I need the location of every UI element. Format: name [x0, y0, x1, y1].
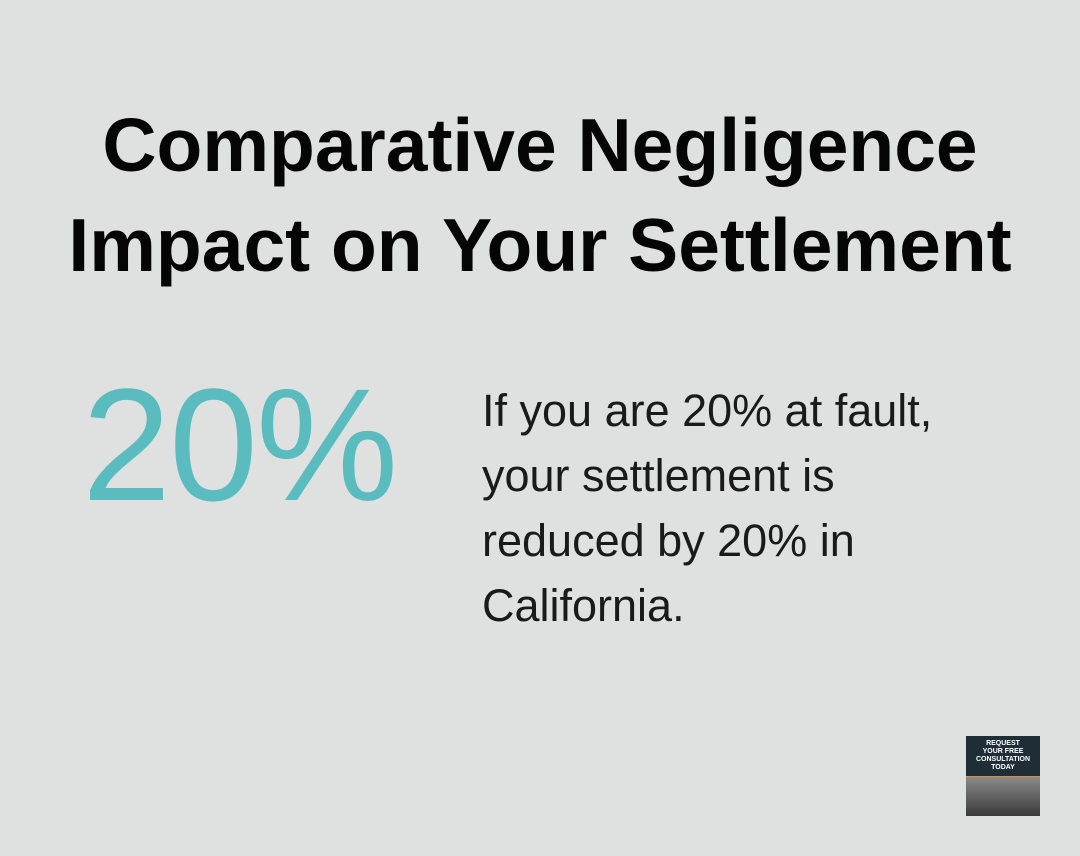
title: Impact on Your Settlement — [68, 203, 1012, 287]
badge: consultation: REQUEST — [986, 740, 1020, 747]
big statistic: 20% — [82, 355, 396, 534]
title — [68, 103, 1012, 287]
badge: consultation: CONSULTATION — [976, 756, 1030, 763]
badge: consultation: YOUR FREE — [983, 748, 1023, 755]
description text: If you are 20% at fault, your settlement is reduced by 20% in California. — [482, 385, 932, 631]
badge: consultation — [966, 736, 1040, 815]
title: Comparative Negligence — [102, 103, 978, 187]
badge: consultation: TODAY — [991, 764, 1015, 771]
